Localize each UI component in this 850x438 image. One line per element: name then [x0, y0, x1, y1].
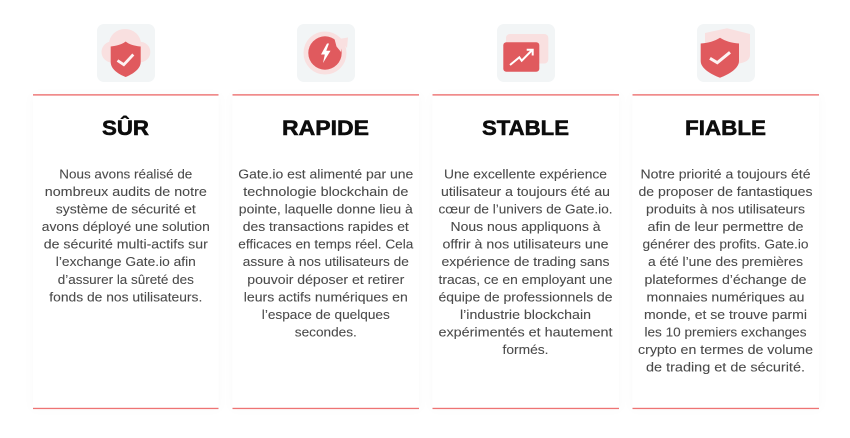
text block: fiable: générer des profits. Gate.io: [642, 237, 808, 252]
panel: sûr: [33, 24, 218, 409]
text block: rapide: Gate.io est alimenté par une: [238, 166, 413, 182]
text block: fiable: [638, 166, 813, 374]
text block: rapide: secondes.: [295, 324, 357, 339]
text block: stable: Une excellente expérience: [444, 166, 607, 182]
text block: stable: cœur de l’univers de Gate.io.: [438, 202, 612, 217]
text block: fiable: crypto en termes de volume: [638, 342, 813, 357]
text block: rapide: l’espace de quelques: [262, 307, 390, 322]
text block: stable: équipe de professionnels de: [438, 289, 612, 304]
text block: rapide: efficaces en temps réel. Cela: [238, 237, 414, 252]
text block: sûr: d’assurer la sûreté des: [58, 272, 194, 287]
text block: fiable: Notre priorité a toujours été: [640, 166, 810, 182]
text block: stable: [438, 166, 613, 357]
text block: sûr: nombreux audits de notre: [45, 184, 207, 199]
text block: sûr: [42, 166, 210, 304]
text block: fiable: les 10 premiers exchanges: [644, 324, 807, 339]
heading: fiable: FIABLE: [685, 117, 766, 140]
text block: fiable: de trading et de sécurité.: [646, 360, 805, 374]
text block: sûr: de sécurité multi-actifs sur: [44, 237, 209, 252]
text block: fiable: a été l’une des premières: [648, 254, 804, 269]
panel: fiable: [632, 24, 819, 409]
icon: layered shield: [697, 24, 755, 82]
panel: stable: [432, 24, 619, 409]
text block: stable: l’industrie blockchain: [460, 307, 591, 322]
text block: rapide: pointe, laquelle donne lieu à: [239, 202, 414, 217]
text block: stable: offrir à nos utilisateurs une: [442, 237, 608, 252]
text block: stable: tracas, ce en employant une: [438, 272, 612, 287]
text block: fiable: monnaies numériques au: [646, 289, 804, 304]
text block: rapide: leurs actifs numériques en: [244, 289, 408, 304]
text block: sûr: l’exchange Gate.io afin: [56, 254, 196, 269]
text block: rapide: des transactions rapides et: [243, 219, 409, 234]
text block: fiable: afin de leur permettre de: [648, 219, 804, 234]
text block: rapide: technologie blockchain de: [243, 184, 408, 199]
icon: rising chart: [497, 24, 555, 82]
text block: sûr: fonds de nos utilisateurs.: [49, 289, 202, 304]
text block: fiable: monde, et se trouve parmi: [644, 307, 807, 322]
text block: fiable: plateformes d’échange de: [644, 272, 806, 287]
text block: stable: formés.: [502, 342, 548, 357]
heading: sûr: SÛR: [102, 116, 149, 140]
text block: stable: Nous nous appliquons à: [450, 219, 601, 234]
text block: stable: expérimentés et hautement: [438, 324, 613, 339]
heading: rapide: RAPIDE: [282, 117, 369, 140]
heading: stable: STABLE: [482, 117, 569, 140]
text block: fiable: produits à nos utilisateurs: [646, 202, 806, 217]
icon: shield on cloud: [97, 24, 155, 82]
text block: stable: expérience de trading sans: [442, 254, 610, 269]
text block: sûr: avons déployé une solution: [42, 219, 210, 234]
text block: stable: utilisateur a toujours été au: [441, 184, 610, 199]
text block: rapide: pouvoir déposer et retirer: [247, 272, 405, 287]
text block: fiable: de proposer de fantastiques: [638, 184, 813, 199]
panel: rapide: [232, 24, 419, 409]
text block: rapide: [238, 166, 414, 339]
text block: sûr: Nous avons réalisé de: [59, 166, 192, 182]
icon: lightning bolt in circular arrow: [297, 24, 355, 82]
text block: rapide: assure à nos utilisateurs de: [243, 254, 409, 269]
text block: sûr: système de sécurité et: [56, 202, 196, 217]
